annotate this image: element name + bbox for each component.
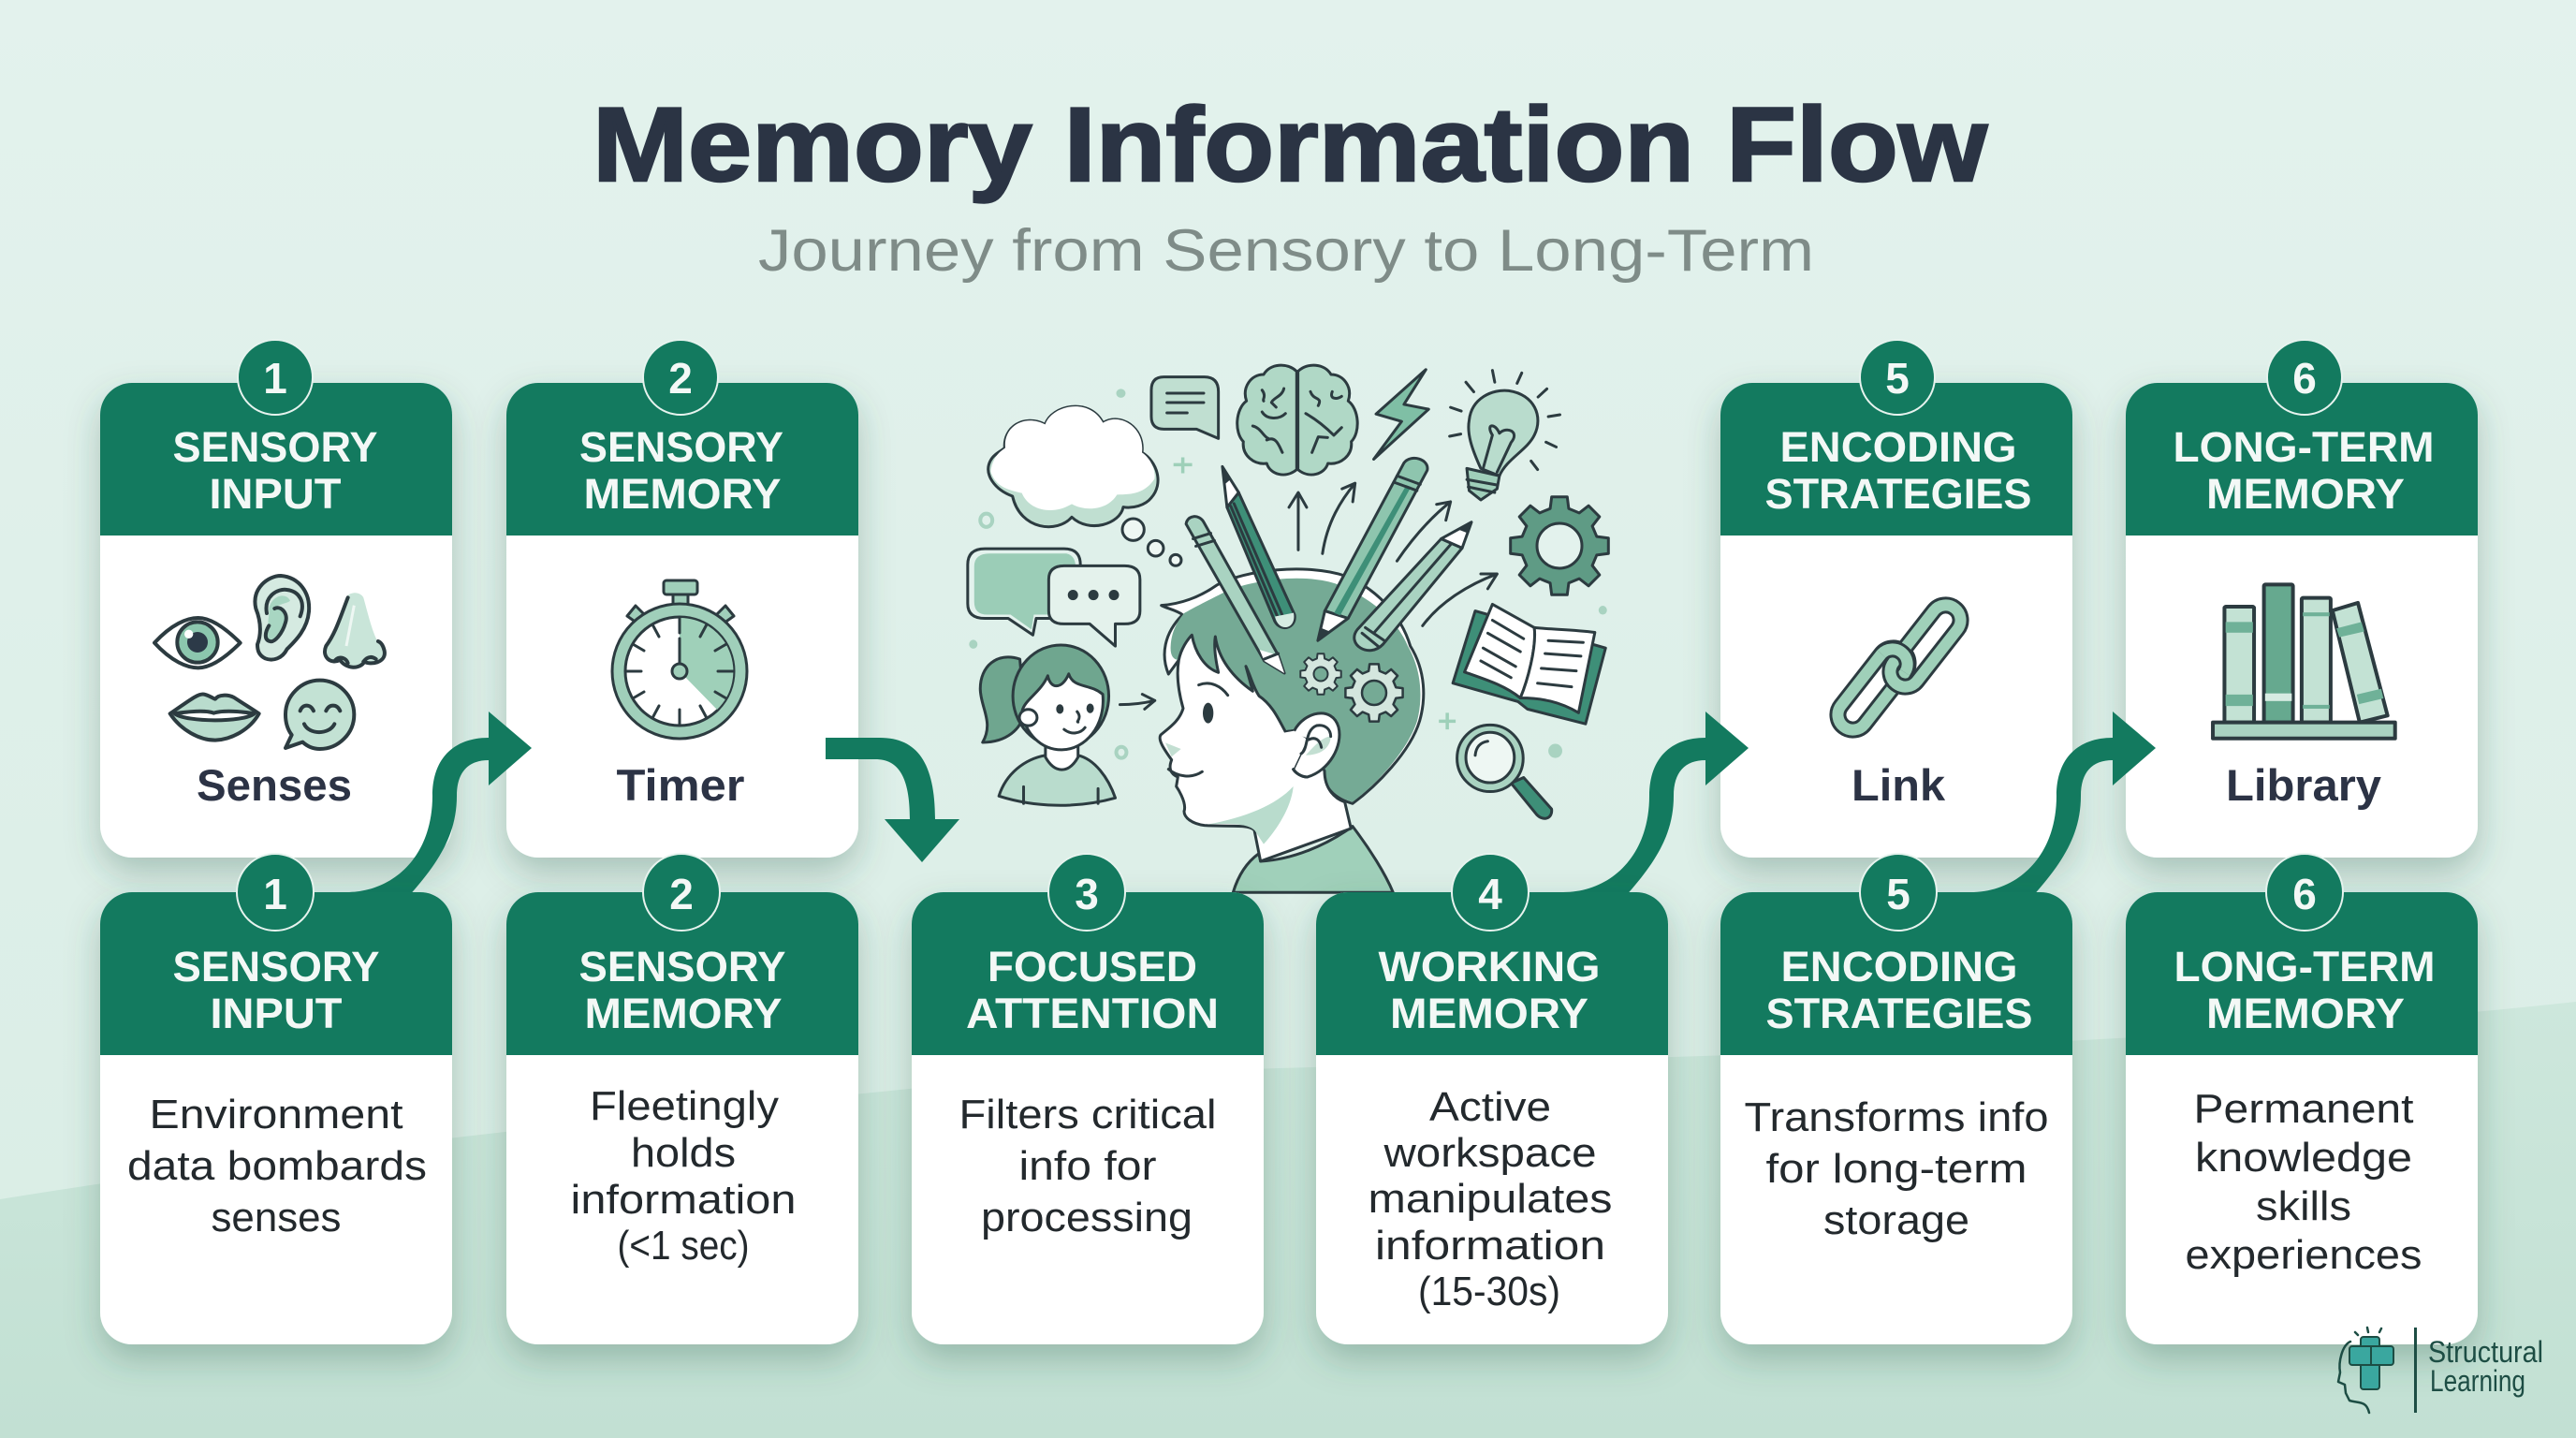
panel: bottom card 3 focused attention	[912, 854, 1264, 1344]
icon: thought cloud	[988, 406, 1181, 565]
description	[1745, 1094, 2048, 1243]
heading	[172, 423, 378, 518]
icon: small chat bubble	[1151, 377, 1219, 438]
panel: top card 1 sensory input	[100, 340, 452, 858]
arrow: working memory to encoding strategies	[1526, 712, 1749, 897]
number badge	[1048, 854, 1125, 931]
panel: bottom card 4 working memory	[1316, 854, 1668, 1344]
title: Memory Information Flow	[593, 86, 1988, 203]
number badge: 6	[2292, 870, 2317, 918]
description: information	[571, 1177, 796, 1223]
icon: decorative dots	[969, 389, 1607, 758]
heading: SENSORY	[172, 943, 380, 990]
description: senses	[212, 1195, 341, 1240]
heading: ATTENTION	[966, 990, 1219, 1037]
heading	[2174, 423, 2434, 518]
description: information	[1375, 1223, 1605, 1269]
heading	[1765, 423, 2031, 518]
description: Transforms info	[1745, 1094, 2048, 1140]
arrow: sensory input to sensory memory	[309, 712, 532, 897]
description: processing	[981, 1195, 1193, 1240]
icon: speech bubbles	[968, 549, 1140, 646]
icon label: Link	[1852, 760, 1946, 810]
icon: boy head	[1160, 569, 1424, 892]
icon: books on shelf	[2213, 584, 2395, 739]
number badge	[1452, 854, 1529, 931]
subtitle: Journey from Sensory to Long-Term	[758, 218, 1814, 284]
heading: SENSORY	[579, 423, 783, 471]
number badge: 5	[1885, 354, 1910, 403]
heading: STRATEGIES	[1765, 470, 2031, 518]
description	[127, 1092, 427, 1240]
icon: head with cross	[2338, 1328, 2393, 1413]
number badge	[237, 854, 314, 931]
description: Active	[1429, 1084, 1551, 1130]
description	[1368, 1084, 1612, 1314]
panel: bottom card 2 sensory memory	[506, 854, 858, 1344]
heading	[966, 943, 1219, 1037]
number badge: 1	[263, 354, 287, 403]
heading: FOCUSED	[988, 943, 1197, 990]
heading: MEMORY	[2206, 470, 2405, 518]
heading	[1378, 943, 1601, 1037]
number badge	[1860, 340, 1935, 415]
panel: top card 2 sensory memory	[506, 340, 858, 858]
heading: MEMORY	[1390, 990, 1588, 1037]
heading	[579, 423, 783, 518]
description	[571, 1083, 796, 1269]
heading	[578, 943, 786, 1037]
description: (15-30s)	[1418, 1269, 1560, 1314]
logo text	[2428, 1335, 2543, 1398]
icon: chain link	[1832, 599, 1967, 736]
heading	[1765, 943, 2033, 1037]
description: for long-term	[1765, 1146, 2027, 1192]
number badge	[238, 340, 313, 415]
number badge	[1860, 854, 1937, 931]
description: Fleetingly	[590, 1083, 779, 1129]
description: skills	[2256, 1183, 2351, 1229]
number badge	[2267, 340, 2342, 415]
arrow: sensory memory to focused attention	[826, 738, 959, 862]
heading: LONG-TERM	[2174, 423, 2434, 471]
description: (<1 sec)	[618, 1223, 749, 1269]
arrows: thoughts rising	[1120, 483, 1497, 709]
heading: INPUT	[210, 470, 341, 518]
number badge: 1	[263, 870, 287, 918]
number badge	[643, 854, 720, 931]
heading	[2174, 943, 2436, 1037]
heading: ENCODING	[1780, 943, 2018, 990]
heading: SENSORY	[578, 943, 786, 990]
description: data bombards	[127, 1143, 427, 1189]
number badge: 5	[1886, 870, 1910, 918]
panel: bottom card 1 sensory input	[100, 854, 452, 1344]
description: Filters critical	[959, 1092, 1217, 1137]
description: holds	[631, 1130, 736, 1176]
description: workspace	[1383, 1130, 1597, 1176]
icon: open book	[1453, 604, 1605, 724]
panel: top card 5 encoding strategies	[1720, 340, 2072, 858]
description: experiences	[2185, 1232, 2422, 1278]
description	[2185, 1086, 2422, 1278]
description: Environment	[150, 1092, 402, 1137]
logo text: Learning	[2430, 1364, 2525, 1398]
heading: WORKING	[1378, 943, 1601, 990]
arrow: encoding strategies to long-term memory	[1933, 712, 2156, 897]
central illustration: child thinking	[968, 365, 1608, 892]
icon: gears in head	[1300, 653, 1403, 722]
number badge: 2	[669, 870, 694, 918]
number badge: 2	[668, 354, 693, 403]
heading: STRATEGIES	[1765, 990, 2033, 1037]
icon: pencils	[1186, 458, 1471, 673]
number badge: 3	[1075, 870, 1099, 918]
logo: Structural Learning	[2338, 1328, 2543, 1413]
heading: MEMORY	[2206, 990, 2405, 1037]
number badge: 4	[1478, 870, 1502, 918]
icon: lightning bolt	[1374, 370, 1428, 459]
panel: bottom card 5 encoding strategies	[1720, 854, 2072, 1344]
icon: large gear	[1511, 497, 1608, 594]
number badge: 6	[2292, 354, 2317, 403]
number badge	[2266, 854, 2343, 931]
icon: brain	[1237, 365, 1357, 475]
icon: girl	[980, 645, 1115, 805]
heading: ENCODING	[1780, 423, 2016, 471]
icon: stopwatch	[612, 580, 747, 739]
heading: MEMORY	[584, 470, 781, 518]
icon label: Library	[2226, 760, 2381, 810]
heading: INPUT	[210, 990, 343, 1037]
number badge	[643, 340, 718, 415]
icon label: Senses	[197, 760, 352, 810]
shirt	[1233, 827, 1393, 892]
panel: top card 6 long-term memory	[2126, 340, 2478, 858]
description	[959, 1092, 1217, 1240]
description: Permanent	[2194, 1086, 2413, 1132]
heading	[172, 943, 380, 1037]
description: info for	[1018, 1143, 1157, 1189]
icon: light bulb	[1450, 371, 1560, 500]
heading: MEMORY	[584, 990, 783, 1037]
heading: LONG-TERM	[2174, 943, 2436, 990]
icon: magnifying glass	[1457, 725, 1552, 818]
description: storage	[1823, 1197, 1969, 1243]
icon label: Timer	[616, 760, 745, 810]
logo text: Structural	[2428, 1335, 2543, 1369]
description: knowledge	[2195, 1135, 2412, 1181]
icon: senses	[154, 576, 385, 749]
panel: bottom card 6 long-term memory	[2126, 854, 2478, 1344]
description: manipulates	[1368, 1176, 1612, 1222]
heading: SENSORY	[172, 423, 378, 471]
